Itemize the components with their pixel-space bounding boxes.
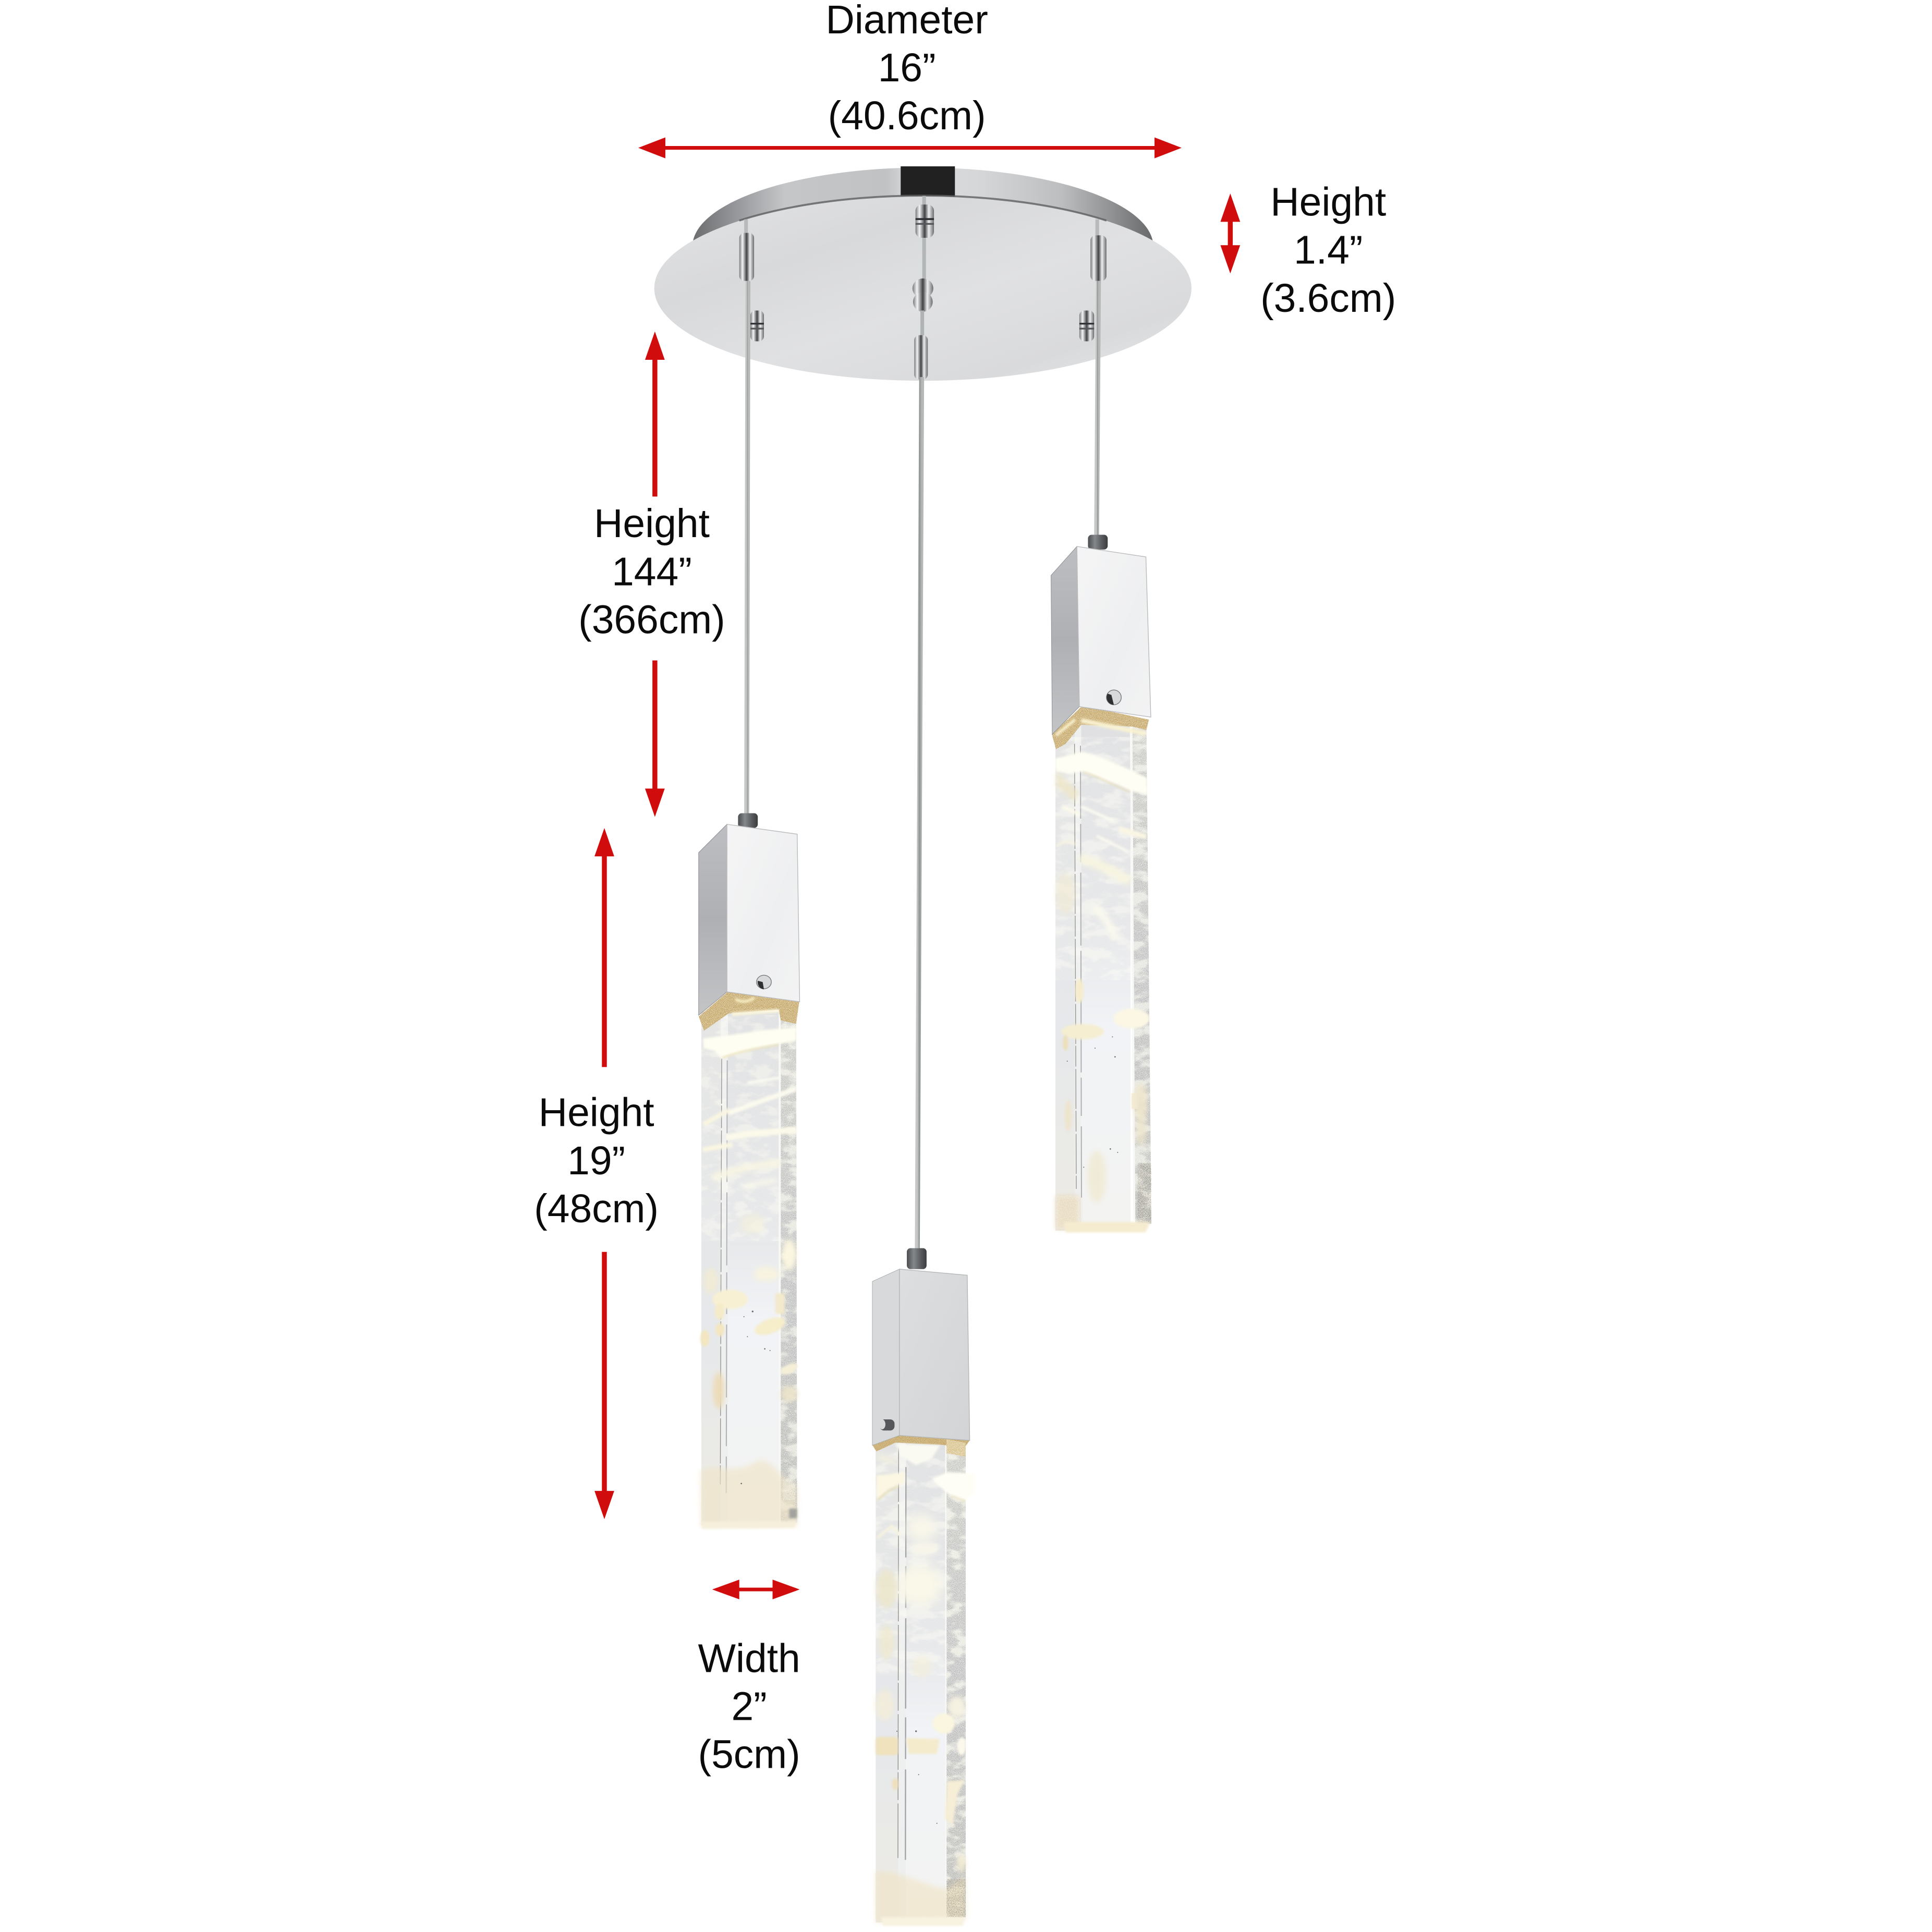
label: width: Width (698, 1636, 800, 1681)
arrow: canopy height (1220, 193, 1240, 274)
label: cable height: (366cm) (578, 598, 725, 642)
cable stub centre lower (920, 310, 924, 337)
fitting: right small (1079, 310, 1094, 342)
screw left (757, 975, 771, 989)
bottom glow left (700, 1460, 797, 1529)
streaks right (1055, 752, 1150, 1203)
bubbles centre (896, 1730, 938, 1824)
box right (1051, 546, 1151, 734)
label: pendant height: (48cm) (534, 1186, 659, 1231)
label: cable height: 144” (612, 549, 692, 594)
gold band centre (872, 1435, 970, 1456)
canopy (654, 166, 1192, 381)
bubbles right (1067, 1036, 1118, 1168)
bottom glow centre (876, 1872, 966, 1926)
mounting plate (654, 196, 1192, 381)
fitting: centre long (914, 335, 928, 380)
gold band right (1052, 706, 1149, 749)
cable stub centre top (922, 196, 926, 282)
arrow: diameter (638, 137, 1182, 159)
fitting: left long (739, 233, 754, 281)
label: diameter: 16” (878, 45, 936, 90)
fitting: right long (1090, 235, 1107, 281)
crystal left (699, 992, 799, 1529)
label: pendant height: Height (539, 1090, 654, 1135)
label: cable height: Height (594, 501, 710, 546)
cable right (1097, 281, 1099, 537)
plate rim shadow (739, 196, 1107, 221)
cable stub right (1096, 220, 1099, 237)
fitting: centre top (916, 204, 934, 238)
label: canopy height: (3.6cm) (1260, 276, 1396, 321)
label: diameter: (40.6cm) (828, 93, 986, 138)
label: pendant height: 19” (567, 1138, 625, 1183)
box centre (872, 1269, 970, 1445)
nut right (1088, 534, 1108, 550)
bottom glow right (1056, 1163, 1151, 1232)
label: width: 2” (731, 1684, 767, 1729)
canopy rim (692, 167, 1153, 325)
fitting: left small (750, 310, 764, 342)
cable left (747, 281, 748, 813)
arrow: pendant height upper (594, 828, 614, 1067)
box left (699, 824, 800, 1015)
bubbles left (740, 1310, 771, 1484)
crystal right (1052, 706, 1151, 1232)
cable stub left (744, 220, 748, 237)
cable centre (917, 377, 921, 1248)
nut left (738, 813, 758, 828)
rim dark band (901, 166, 955, 197)
label: canopy height: 1.4” (1294, 228, 1363, 273)
streaks left (700, 1027, 799, 1409)
streaks centre (875, 1443, 975, 1872)
arrow: cable height upper (645, 332, 665, 496)
crystal centre (872, 1435, 975, 1926)
arrow: width (712, 1579, 800, 1599)
pendant: left (699, 281, 800, 1529)
arrow: cable height lower (645, 661, 665, 817)
fitting: centre bead (913, 278, 933, 312)
label: width: (5cm) (698, 1732, 800, 1777)
nut centre (907, 1248, 927, 1269)
pendant: centre (872, 377, 975, 1926)
pendant: right (1051, 281, 1151, 1232)
screw centre (879, 1419, 894, 1430)
screw right (1107, 690, 1121, 705)
gold band left (699, 992, 799, 1031)
arrow: pendant height lower (594, 1252, 614, 1519)
label: canopy height: Height (1270, 180, 1386, 225)
